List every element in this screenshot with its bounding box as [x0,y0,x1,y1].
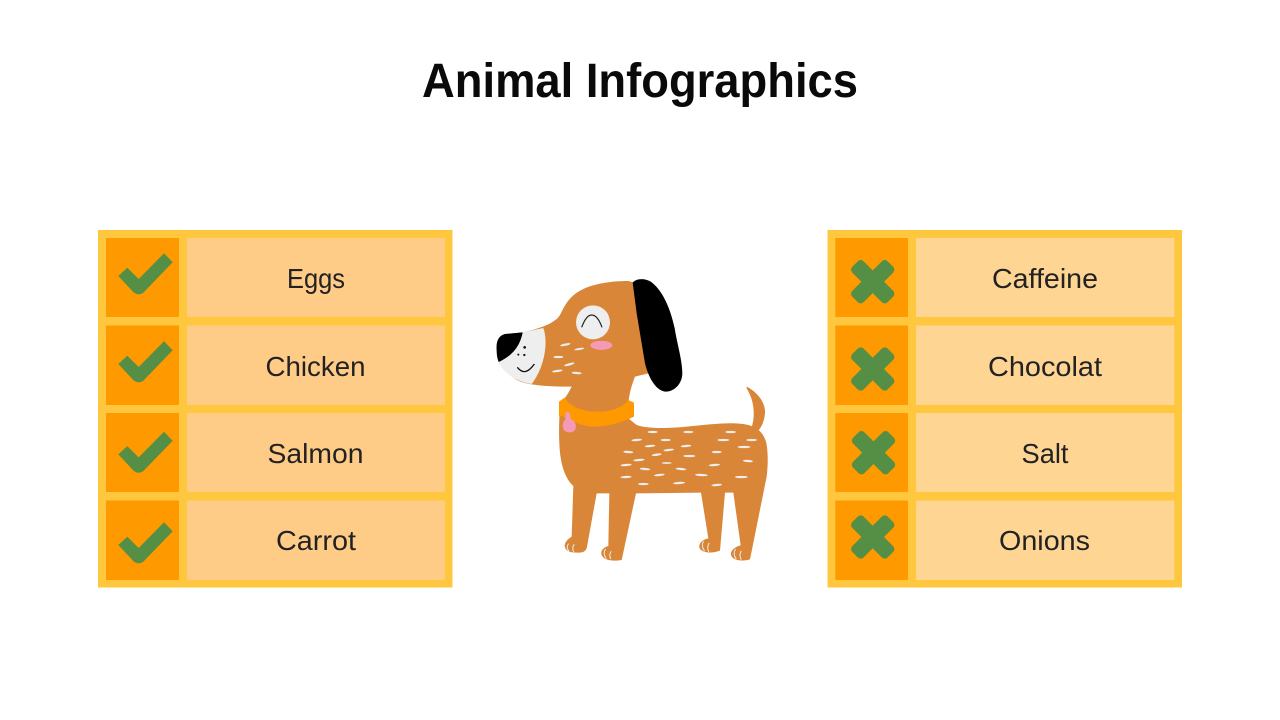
row: eggs [106,238,445,317]
row: salmon: Salmon [268,438,364,469]
row: chocolat [835,326,1174,405]
dog body [497,281,768,561]
panel: foods to avoid [828,230,1182,588]
dog nose [497,332,523,362]
dog claws [567,542,741,559]
row: carrot: Carrot [276,525,356,556]
row: chocolat: Chocolat [988,351,1102,382]
dog tag [563,412,576,432]
dog ear [633,279,682,392]
title: Animal Infographics [422,55,858,108]
dog eye [576,305,610,339]
row: salt: Salt [1022,438,1069,469]
row: onions: Onions [999,525,1090,556]
dog nostrils and mouth [517,346,534,372]
panel: foods allowed [98,230,452,588]
row: chicken: Chicken [266,351,366,382]
dog collar [559,398,634,427]
row: salmon [106,413,445,492]
illustration: dog [497,279,768,561]
row: caffeine: Caffeine [992,263,1098,294]
dog tail [747,387,765,431]
row: salt [835,413,1174,492]
row: caffeine [835,238,1174,317]
row: onions [835,500,1174,580]
dog fur marks [552,342,757,487]
row: eggs: Eggs [287,263,345,294]
row: chicken [106,326,445,405]
dog cheek [590,341,612,350]
row: carrot [106,500,445,580]
dog muzzle [498,328,546,384]
